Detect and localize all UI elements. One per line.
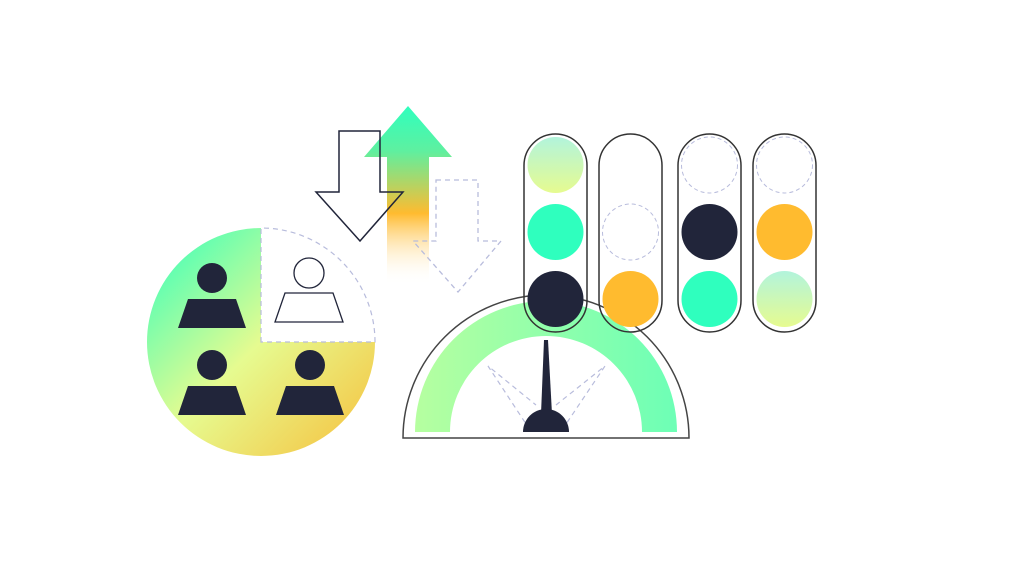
gauge — [403, 295, 689, 438]
arrow: outline down — [316, 131, 403, 241]
arrow: gradient up — [364, 106, 452, 285]
traffic light 4 — [753, 134, 816, 332]
arrow: dashed down — [413, 180, 501, 292]
gauge needle — [523, 340, 569, 432]
person outline — [275, 258, 343, 322]
person bottom-right — [276, 350, 344, 415]
traffic light 3 — [678, 134, 741, 332]
people circle — [147, 228, 375, 456]
person bottom-left — [178, 350, 246, 415]
traffic light 2 — [599, 134, 662, 332]
person top-left — [178, 263, 246, 328]
traffic light 1 — [524, 134, 587, 332]
